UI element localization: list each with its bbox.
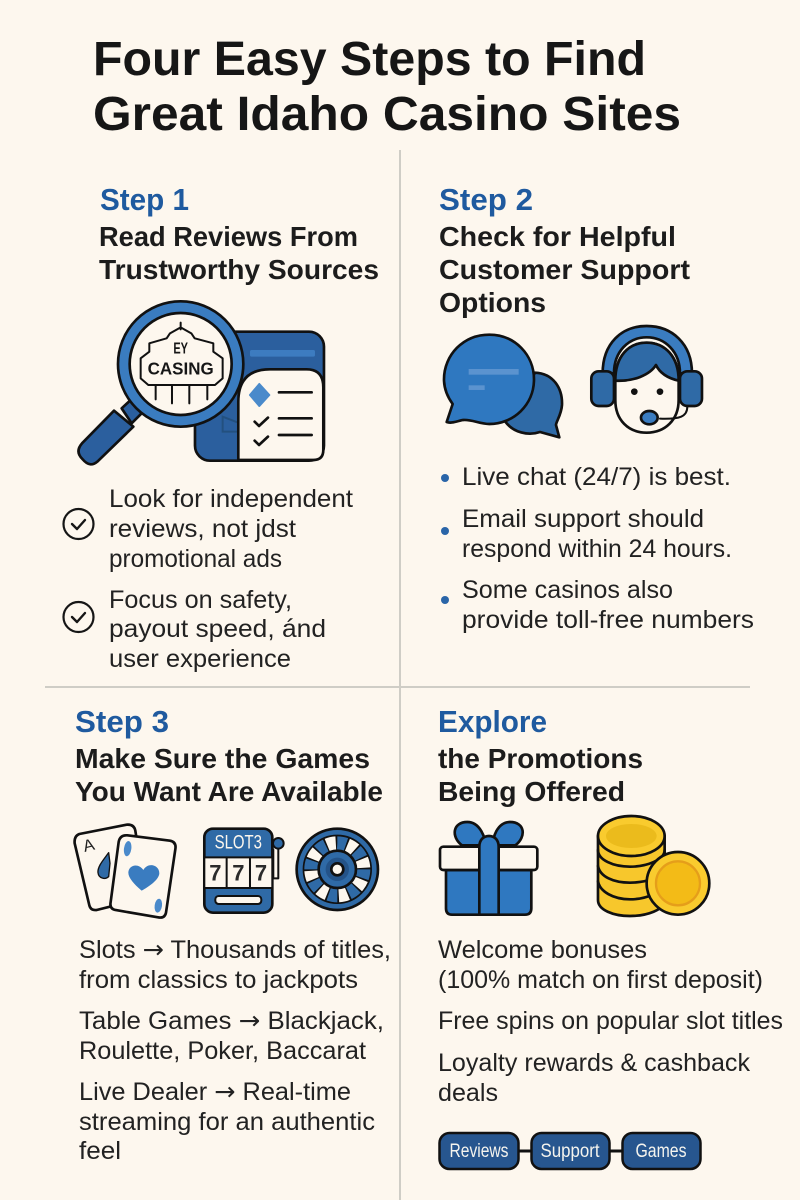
text: focus: Focus on safety, [109,586,292,614]
icon: slot machine: 7 [255,861,267,886]
step 2 heading: Step 2 [439,182,533,217]
step 3 game list [79,935,391,1165]
icon: support agent with headset [591,326,702,433]
step 1 checklist [64,485,353,673]
icon: slot machine: 7 [209,861,221,886]
title: Four Easy Steps to Find [93,33,646,86]
text: loyalty rewards [438,1049,750,1107]
panel: step 2 [439,182,754,634]
icon: slot machine: 7 [232,861,244,886]
text: welcome bonuses: (100% match on first deposit) [438,966,763,994]
pill: reviews: Reviews [450,1141,508,1162]
text: independent reviews: Look for independent [109,485,353,513]
flow of pills: reviews, support, games [440,1133,700,1169]
panel: step 4 [438,704,783,1169]
text: welcome bonuses [438,936,763,994]
text: independent reviews: promotional ads [109,545,282,573]
pill: games: Games [636,1141,686,1162]
step 4 promotions list [438,936,783,1107]
bullet: email support: respond within 24 hours. [462,535,732,563]
icon: roulette wheel [297,829,378,910]
step 4 heading [438,704,643,807]
text: loyalty rewards: Loyalty rewards & cashback [438,1049,750,1077]
icon: magnifying glass over casino review document: CASING [148,358,214,378]
bullet: email support: Email support should [462,505,704,533]
panel: step 1 [64,182,379,673]
pill: reviews [440,1133,518,1169]
pill: support: Support [540,1141,600,1162]
text: slots [79,935,391,994]
text: welcome bonuses: Welcome bonuses [438,936,647,964]
text: slots: Slots → Thousands of titles, [79,935,391,964]
icon: playing cards: A [81,835,97,856]
icon: gift box [440,822,537,915]
icon: gold coins [598,816,709,916]
bullet: email support [441,505,732,563]
panel: step 3 [75,704,391,1165]
step 4 heading: Being Offered [438,776,625,807]
text: live dealer: feel [79,1137,121,1165]
step 2 heading: Options [439,287,546,318]
step 1 heading: Read Reviews From [99,221,358,252]
icon: magnifying glass over casino review document: EY [173,340,188,357]
icon: slot machine [204,829,284,913]
step 3 heading: Make Sure the Games [75,743,370,774]
step 3 heading: Step 3 [75,704,169,739]
step 1 heading: Step 1 [100,182,189,217]
icon: chat bubbles [444,335,562,437]
step 3 heading: You Want Are Available [75,776,383,807]
pill: support [532,1133,610,1169]
step 4 heading: Explore [438,704,547,739]
icon: playing cards [75,825,176,918]
text: table games: Table Games → Blackjack, [79,1006,384,1035]
icon: check circle [64,602,94,632]
step 1 heading: Trustworthy Sources [99,254,379,285]
step 3 heading [75,704,383,807]
bullet: toll-free numbers: Some casinos also [462,576,673,604]
step 2 heading: Customer Support [439,254,690,285]
text: independent reviews: reviews, not jdst [109,515,296,543]
bullet: toll-free numbers: provide toll-free numbers [462,606,754,634]
text: free spins: Free spins on popular slot titles [438,1007,783,1035]
text: loyalty rewards: deals [438,1079,498,1107]
text: independent reviews [109,485,353,573]
text: table games: Roulette, Poker, Baccarat [79,1037,366,1065]
text: live dealer: Live Dealer → Real-time [79,1077,351,1106]
text: slots: from classics to jackpots [79,966,358,994]
title [93,33,681,141]
text: focus: payout speed, ánd [109,615,326,643]
title: Great Idaho Casino Sites [93,88,681,141]
icon: slot machine: SLOT3 [215,832,262,853]
step 2 heading [439,182,690,318]
step 2 heading: Check for Helpful [439,221,676,252]
bullet: live chat: Live chat (24/7) is best. [462,463,731,491]
pill: games [622,1133,700,1169]
icon: magnifying glass over casino review document [78,301,324,464]
step 1 heading [99,182,379,285]
step 4 heading: the Promotions [438,743,643,774]
text: live dealer: streaming for an authentic [79,1108,375,1136]
text: table games [79,1006,384,1065]
bullet: toll-free numbers [441,576,754,634]
icon: check circle [64,509,94,539]
text: focus [109,586,326,673]
text: live dealer [79,1077,375,1165]
step 2 bullet list [441,463,754,634]
text: focus: user experience [109,645,291,673]
